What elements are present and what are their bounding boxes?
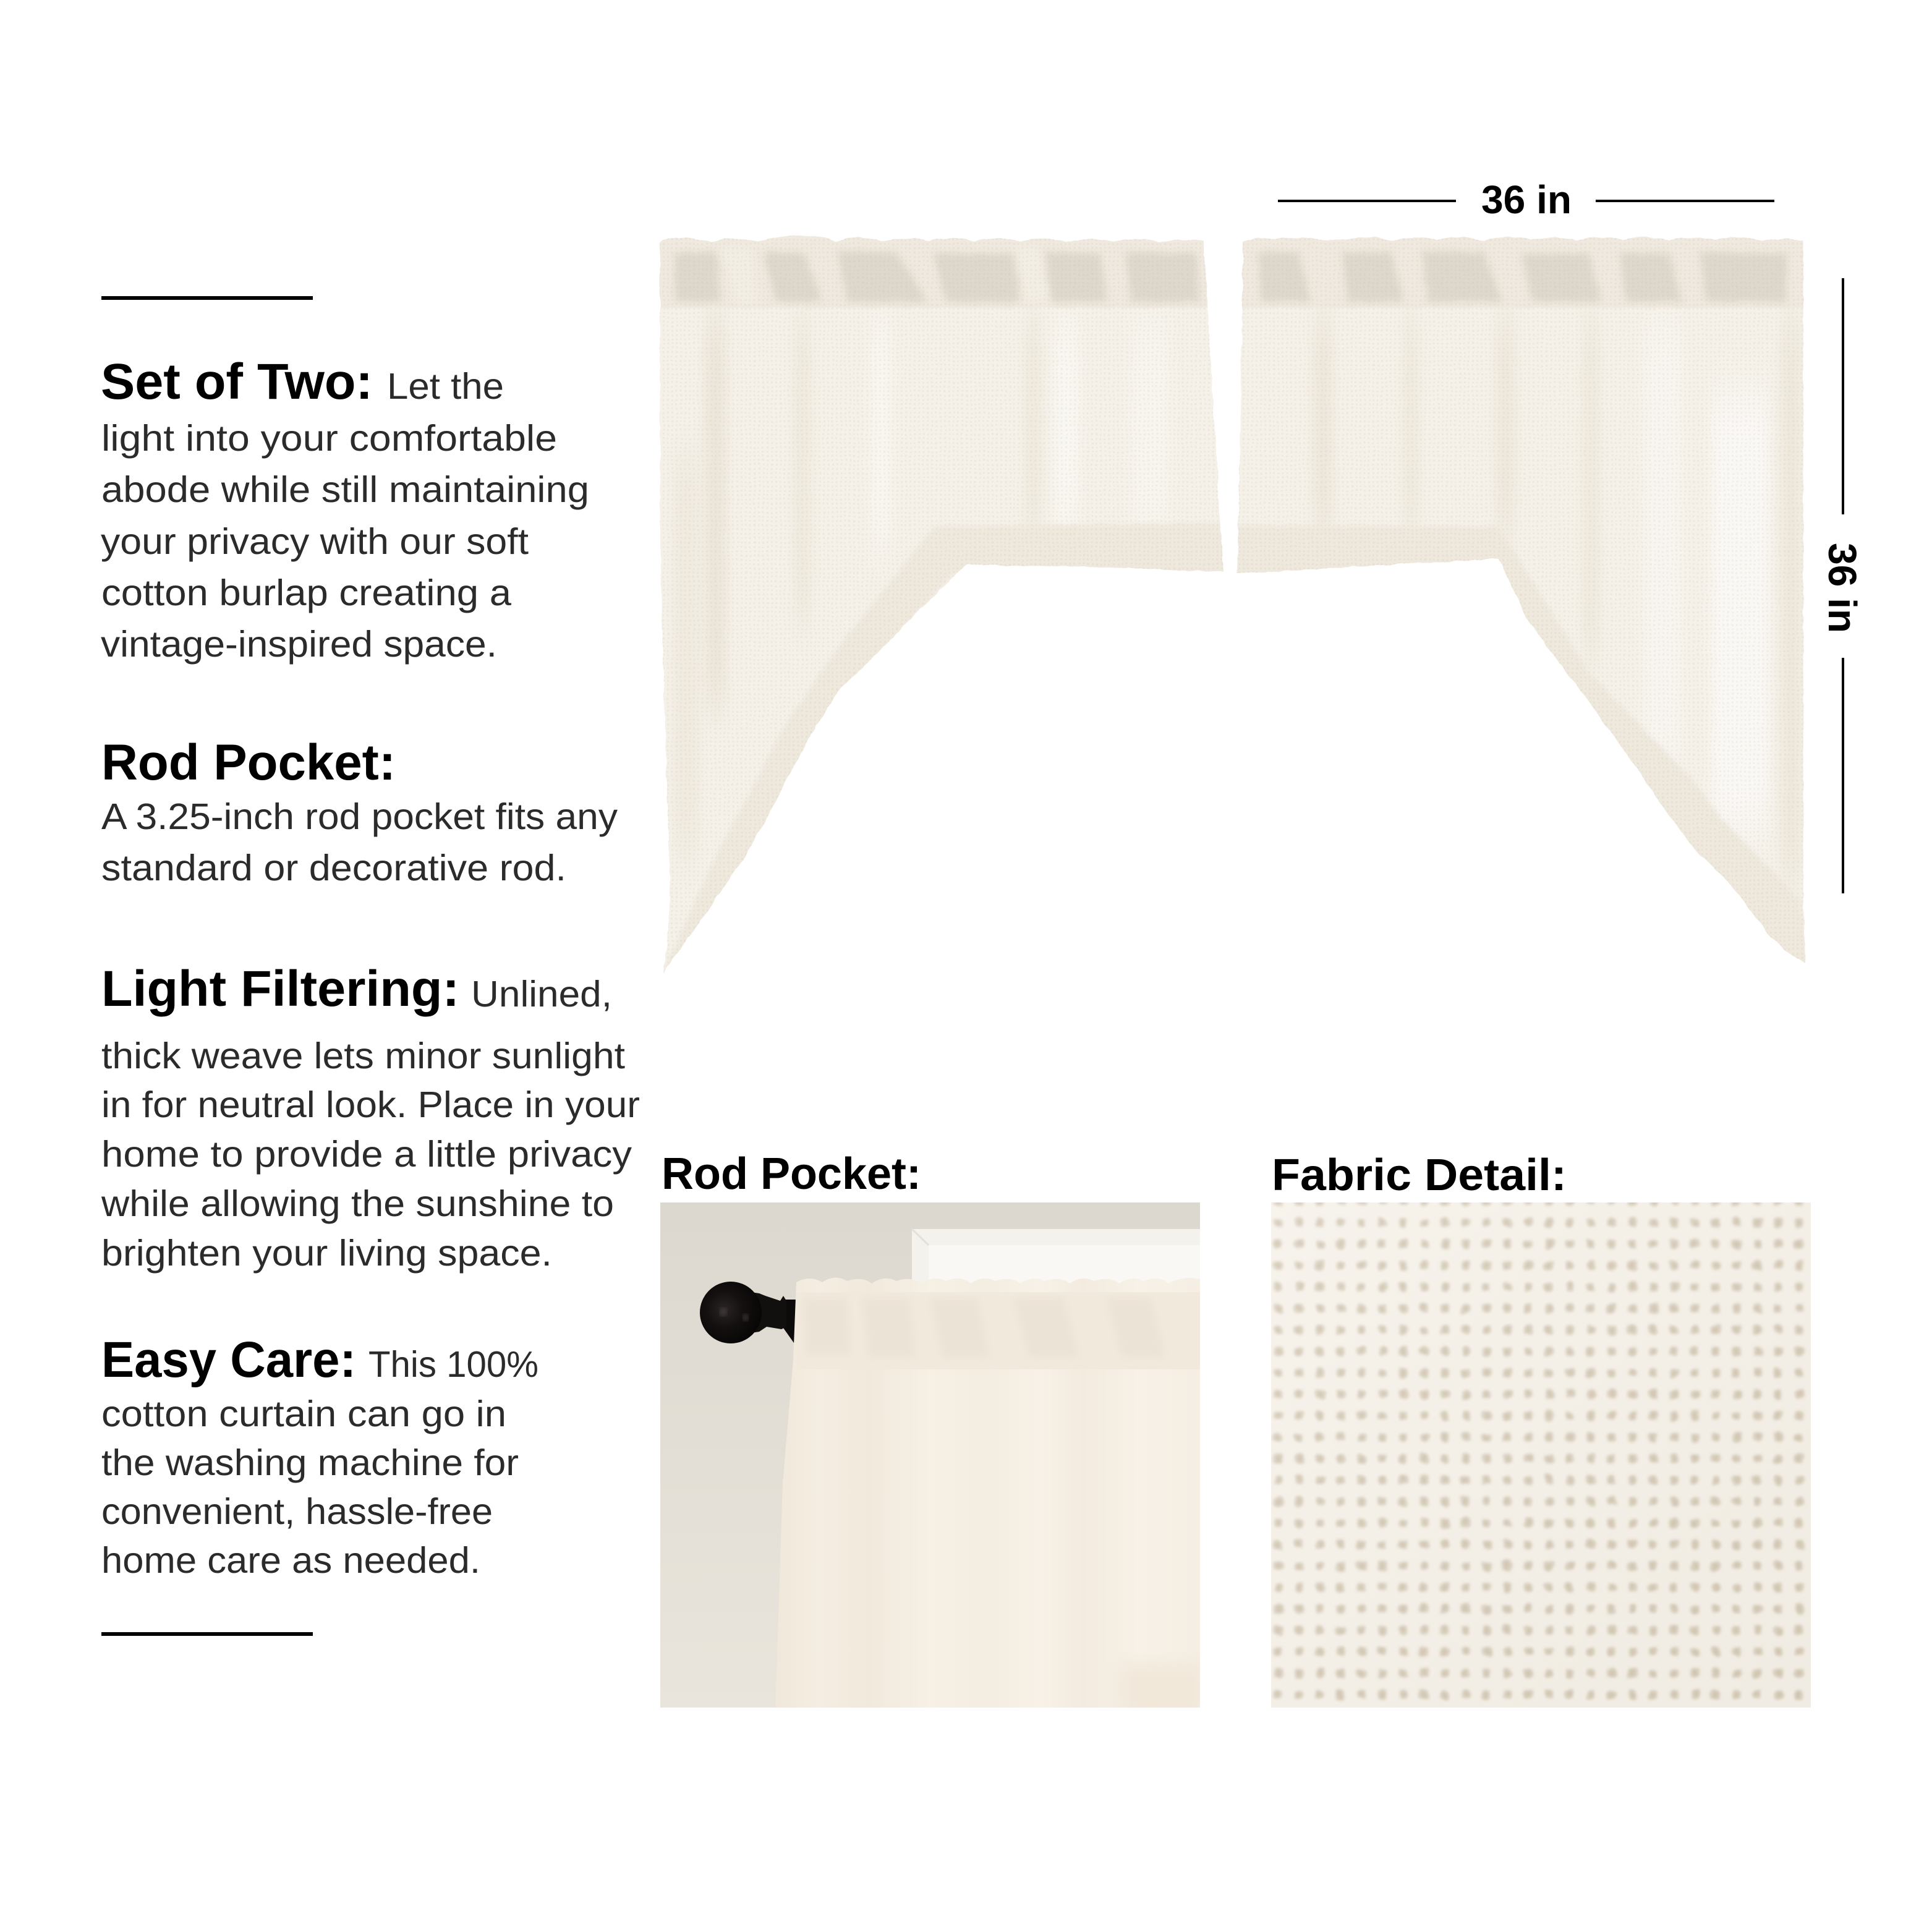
curtain fabric bbox=[775, 1277, 1202, 1713]
text block: easy care bbox=[101, 1332, 538, 1581]
text block: light filtering bbox=[101, 961, 640, 1274]
text block: light filtering: home to provide a little privacy bbox=[101, 1134, 632, 1175]
bottom hem bbox=[1236, 526, 1811, 977]
heading: rod pocket photo: Rod Pocket: bbox=[662, 1149, 921, 1199]
pocket shading bbox=[796, 1292, 1204, 1369]
photo: rod pocket closeup bbox=[660, 1202, 1206, 1719]
text block: easy care: home care as needed. bbox=[101, 1540, 480, 1581]
text block: set of two: Set of Two: bbox=[101, 354, 373, 410]
bottom hem bbox=[655, 523, 1230, 989]
text block: set of two: cotton burlap creating a bbox=[101, 572, 511, 613]
lower hem shadow bbox=[1119, 1663, 1206, 1719]
left swag curtain panel bbox=[655, 232, 1230, 989]
curtain rod and finial bbox=[700, 1282, 801, 1343]
fold streaks bbox=[679, 325, 1072, 831]
text block: easy care: This 100% bbox=[368, 1344, 538, 1385]
text block: set of two: your privacy with our soft bbox=[101, 521, 529, 562]
text block: rod pocket bbox=[101, 734, 618, 888]
text block: easy care: Easy Care: bbox=[101, 1332, 356, 1388]
horizontal dimension: 36 in: 36 in bbox=[1481, 177, 1572, 222]
text block: set of two: vintage-inspired space. bbox=[101, 624, 497, 665]
text block: light filtering: in for neutral look. Place in your bbox=[101, 1084, 640, 1125]
text block: light filtering: Unlined, bbox=[471, 974, 612, 1015]
text block: set of two: abode while still maintaining bbox=[101, 469, 589, 510]
vertical dimension: 36 in: 36 in bbox=[1820, 543, 1865, 633]
text block: set of two: Let the bbox=[387, 366, 504, 407]
text block: light filtering: thick weave lets minor sunlight bbox=[101, 1036, 625, 1076]
rod pocket band bbox=[655, 232, 1212, 308]
text block: rod pocket: Rod Pocket: bbox=[101, 734, 396, 791]
text block: light filtering: while allowing the sunshine to bbox=[101, 1183, 614, 1224]
bottom rule bbox=[101, 1632, 313, 1636]
text block: set of two: light into your comfortable bbox=[101, 418, 557, 459]
horizontal dimension: 36 in bbox=[1278, 177, 1774, 222]
text block: rod pocket: A 3.25-inch rod pocket fits any bbox=[101, 796, 618, 837]
text block: rod pocket: standard or decorative rod. bbox=[101, 848, 566, 888]
photo: fabric detail weave bbox=[1255, 1187, 1830, 1725]
window frame bbox=[912, 1229, 1204, 1295]
left column: feature text bbox=[101, 296, 640, 1636]
text block: set of two bbox=[101, 354, 589, 665]
heading: fabric detail: Fabric Detail: bbox=[1272, 1151, 1567, 1200]
right swag curtain panel bbox=[1233, 232, 1811, 977]
vertical dimension: 36 in bbox=[1820, 278, 1865, 893]
top rule bbox=[101, 296, 313, 300]
text block: easy care: cotton curtain can go in bbox=[101, 1394, 506, 1434]
text block: light filtering: Light Filtering: bbox=[101, 961, 459, 1017]
text block: easy care: the washing machine for bbox=[101, 1442, 519, 1483]
rod pocket band bbox=[1233, 232, 1811, 308]
fold streaks bbox=[1314, 321, 1802, 878]
wall bbox=[660, 1202, 1200, 1708]
text block: easy care: convenient, hassle-free bbox=[101, 1491, 493, 1532]
text block: light filtering: brighten your living space. bbox=[101, 1233, 552, 1274]
